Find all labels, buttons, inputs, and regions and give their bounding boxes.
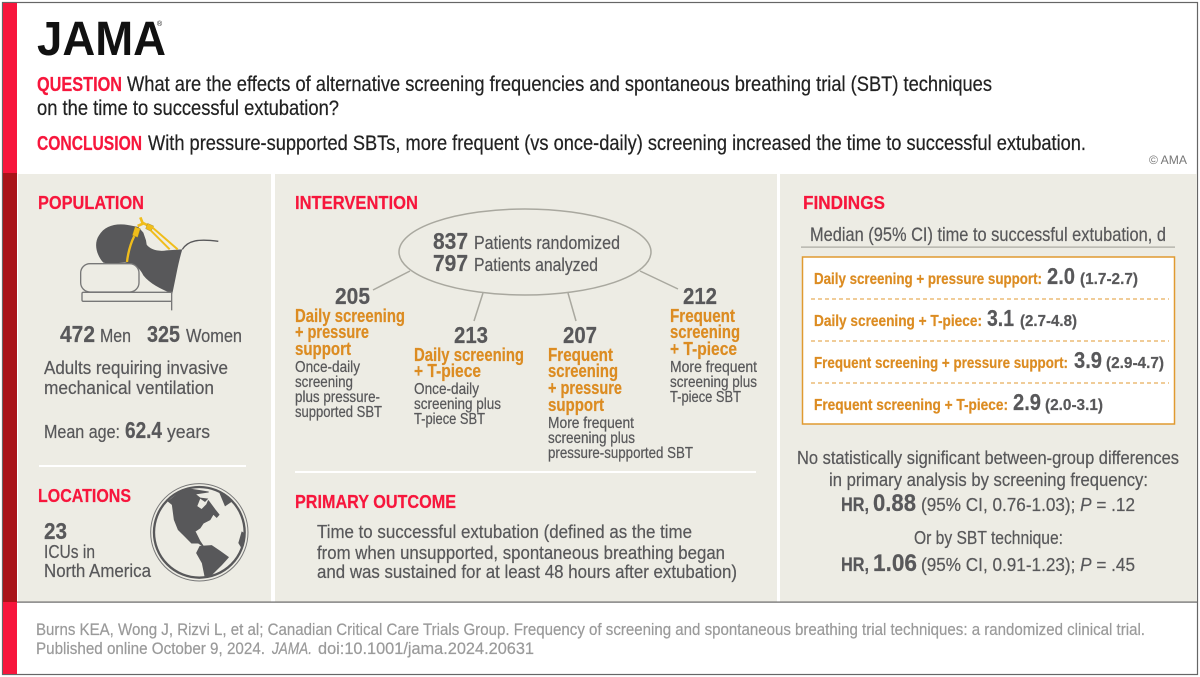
- row: daily + pressure support: 2.0: [1047, 263, 1075, 289]
- panel: findings: [780, 174, 1197, 602]
- row: daily + pressure support: [814, 263, 1138, 289]
- arm: frequent + T-piece: T-piece SBT: [670, 389, 741, 406]
- arm: daily + pressure support: 205: [335, 283, 370, 309]
- randomization ellipse: Patients analyzed: [474, 254, 598, 275]
- panel: population and locations: [18, 174, 271, 602]
- icon: ventilated patient: [81, 217, 218, 310]
- row: frequent + T-piece: (2.0-3.1): [1045, 397, 1103, 414]
- arm: daily + pressure support: screening: [295, 374, 353, 391]
- sex counts: Men: [100, 325, 131, 346]
- population description: Adults requiring invasive: [44, 357, 228, 378]
- JAMA logo: ®: [157, 20, 163, 28]
- randomization ellipse: Patients randomized: [474, 232, 620, 253]
- arm: frequent + pressure support: screening plus: [548, 430, 635, 447]
- randomization ellipse: [399, 209, 651, 295]
- icon: globe: [151, 484, 248, 581]
- arm: frequent + T-piece: + T-piece: [670, 339, 737, 359]
- heading: locations: LOCATIONS: [38, 485, 131, 506]
- results box: [802, 257, 1174, 424]
- arm: frequent + pressure support: 207: [563, 322, 597, 348]
- arm: daily + pressure support: + pressure: [295, 322, 369, 342]
- arm: frequent + T-piece: 212: [683, 283, 717, 309]
- primary outcome text: Time to successful extubation (defined as the time: [317, 521, 692, 542]
- connector lines: [373, 271, 678, 321]
- SBT technique result: HR,: [841, 555, 869, 576]
- row: frequent + pressure support: (2.9-4.7): [1106, 355, 1164, 372]
- SBT technique result: 1.06: [873, 550, 917, 577]
- screening frequency result: in primary analysis by screening frequency:: [829, 469, 1148, 490]
- heading: intervention: INTERVENTION: [295, 192, 418, 213]
- conclusion: CONCLUSION: [37, 133, 142, 155]
- question: on the time to successful extubation?: [37, 97, 339, 120]
- arm: daily + pressure support: supported SBT: [295, 404, 382, 421]
- row: daily + T-piece: [814, 305, 1077, 331]
- row: daily + T-piece: (2.7-4.8): [1020, 313, 1077, 330]
- mean age: 62.4: [125, 417, 162, 443]
- question: [37, 73, 992, 120]
- arm: daily + pressure support: support: [295, 339, 351, 359]
- panel: intervention and outcome: [275, 174, 777, 602]
- arm: daily + T-piece: [414, 322, 524, 428]
- mean age: Mean age:: [44, 421, 120, 442]
- citation: JAMA.: [271, 639, 312, 658]
- row: daily + T-piece: 3.1: [987, 305, 1014, 331]
- locations text: 23: [44, 518, 67, 544]
- arm: daily + pressure support: Once-daily: [295, 359, 360, 376]
- sidebar colour strip: [3, 3, 17, 674]
- arm: frequent + pressure support: Frequent: [548, 345, 613, 365]
- arm: daily + T-piece: + T-piece: [414, 361, 481, 381]
- citation: doi:10.1001/jama.2024.20631: [318, 639, 534, 658]
- mean age: [44, 417, 210, 443]
- arm: daily + T-piece: T-piece SBT: [414, 411, 485, 428]
- heading: population: POPULATION: [38, 192, 144, 213]
- arm: frequent + T-piece: screening: [670, 322, 740, 342]
- screening frequency result: HR,: [841, 495, 869, 516]
- locations text: ICUs in: [44, 541, 95, 562]
- arm: frequent + T-piece: [670, 283, 758, 406]
- primary outcome text: from when unsupported, spontaneous breathing began: [317, 542, 725, 563]
- screening frequency result: [797, 447, 1179, 517]
- row: frequent + pressure support: [814, 347, 1164, 373]
- row: frequent + T-piece: [814, 389, 1103, 415]
- mean age: years: [167, 421, 210, 442]
- screening frequency result: (95% CI, 0.76-1.03); P = .12: [921, 494, 1135, 515]
- randomization ellipse: 837: [433, 228, 468, 254]
- row: frequent + T-piece: Frequent screening + T-piece:: [814, 397, 1008, 414]
- arm: daily + T-piece: screening plus: [414, 396, 501, 413]
- heading: findings: FINDINGS: [803, 192, 885, 213]
- population description: [44, 357, 228, 398]
- arm: daily + T-piece: Daily screening: [414, 345, 524, 365]
- SBT technique result: [841, 527, 1135, 577]
- arm: frequent + pressure support: More frequent: [548, 415, 635, 432]
- conclusion: With pressure-supported SBTs, more frequent (vs once-daily) screening increased the time to successful extubation.: [148, 132, 1086, 155]
- row: frequent + pressure support: Frequent screening + pressure support:: [814, 355, 1068, 372]
- JAMA logo: JAMA: [37, 13, 166, 66]
- arm: daily + T-piece: 213: [454, 322, 488, 348]
- sex counts: [60, 321, 242, 347]
- SBT technique result: (95% CI, 0.91-1.23); P = .45: [921, 554, 1135, 575]
- row: daily + pressure support: (1.7-2.7): [1080, 271, 1138, 288]
- screening frequency result: 0.88: [873, 490, 916, 517]
- arm: frequent + pressure support: pressure-supported SBT: [548, 445, 693, 462]
- locations text: [44, 518, 152, 581]
- question: QUESTION: [37, 74, 122, 96]
- arm: frequent + T-piece: Frequent: [670, 306, 735, 326]
- row: frequent + T-piece: 2.9: [1013, 389, 1041, 415]
- arm: frequent + pressure support: screening: [548, 361, 618, 381]
- sex counts: 325: [147, 321, 180, 347]
- primary outcome text: and was sustained for at least 48 hours after extubation): [317, 561, 737, 582]
- row: daily + pressure support: Daily screening + pressure support:: [814, 271, 1042, 288]
- arm: daily + pressure support: Daily screening: [295, 306, 405, 326]
- sex counts: Women: [186, 325, 242, 346]
- question: What are the effects of alternative screening frequencies and spontaneous breathing trial (SBT) techniques: [127, 73, 992, 96]
- arm: frequent + T-piece: More frequent: [670, 359, 758, 376]
- arm: frequent + pressure support: support: [548, 395, 604, 415]
- heading: primary outcome: PRIMARY OUTCOME: [295, 491, 456, 512]
- citation: Published online October 9, 2024.: [36, 639, 265, 658]
- row: frequent + pressure support: 3.9: [1074, 347, 1102, 373]
- locations text: North America: [44, 560, 152, 581]
- arm: daily + pressure support: [295, 283, 405, 421]
- arm: frequent + T-piece: screening plus: [670, 374, 757, 391]
- population description: mechanical ventilation: [44, 377, 214, 398]
- SBT technique result: Or by SBT technique:: [914, 527, 1063, 548]
- arm: daily + pressure support: plus pressure-: [295, 389, 380, 406]
- primary outcome text: [317, 521, 737, 582]
- sex counts: 472: [60, 321, 95, 347]
- row: daily + T-piece: Daily screening + T-piece:: [814, 313, 982, 330]
- copyright: © AMA: [1149, 153, 1187, 167]
- arm: frequent + pressure support: [548, 322, 693, 462]
- arm: daily + T-piece: Once-daily: [414, 381, 479, 398]
- arm: frequent + pressure support: + pressure: [548, 378, 622, 398]
- citation: [36, 620, 1145, 658]
- randomization ellipse: 797: [433, 250, 468, 276]
